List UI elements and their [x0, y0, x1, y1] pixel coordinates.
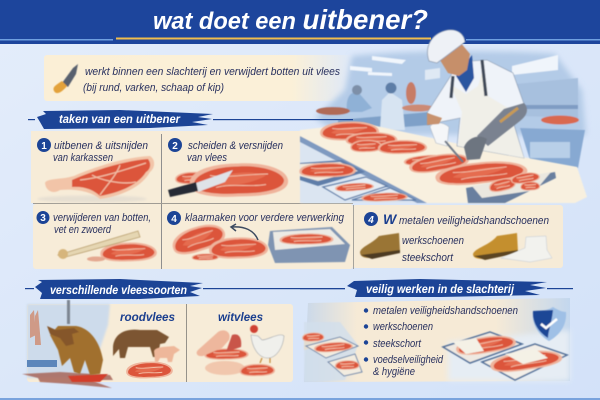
task 1 [37, 138, 154, 202]
bull [47, 300, 103, 375]
illustration: factory background [315, 51, 586, 168]
pig [154, 346, 180, 362]
bullet list: werkschoenen [373, 321, 433, 333]
icon: boot right [473, 233, 518, 260]
trays under table [299, 160, 556, 203]
meat on table [320, 122, 531, 187]
task 3 [36, 211, 157, 262]
intro text [83, 66, 340, 94]
neck [456, 55, 474, 92]
task 4: klaarmaken voor verdere verwerking [185, 212, 345, 224]
task 2: van vlees [187, 152, 227, 164]
hat [428, 30, 465, 63]
bone and meat [58, 231, 157, 262]
tray [268, 227, 350, 263]
icon: shield [533, 307, 566, 341]
heading: roodvlees: roodvlees [120, 312, 175, 324]
title: wat doet een uitbener? [153, 4, 428, 35]
panel: tasks background [31, 131, 563, 269]
task 3: verwijderen van botten, [53, 212, 151, 224]
panel: intro [44, 55, 354, 101]
task 1: 1 [41, 141, 47, 152]
panel: protective gear: metalen veiligheidshandschoenen [399, 215, 549, 227]
banner: vleessoorten: verschillende vleessoorten [50, 285, 187, 297]
panel: protective gear: 4 [367, 215, 374, 226]
icon: boot left [360, 233, 400, 259]
apron [450, 66, 524, 158]
face [440, 42, 470, 76]
task 2 [168, 138, 288, 197]
blood [22, 372, 113, 388]
panel: protective gear: steekschort [402, 252, 454, 264]
left trays [302, 322, 362, 382]
white meat [205, 361, 275, 376]
meat and knife [168, 163, 288, 197]
bullet list [364, 305, 518, 378]
chicken legs [197, 330, 249, 360]
hen [250, 325, 284, 363]
intro text: (bij rund, varken, schaap of kip) [83, 82, 224, 94]
icon: knife [53, 64, 78, 93]
intro text: werkt binnen een slachterij en verwijdert botten uit vlees [85, 66, 340, 78]
task 2: scheiden & versnijden [188, 140, 283, 152]
panel: protective gear: W [383, 211, 398, 227]
banner: vleessoorten [25, 279, 345, 299]
bullet list: metalen veiligheidshandschoenen [373, 305, 518, 317]
task 2: 2 [172, 141, 178, 152]
task 3: vet en zwoerd [54, 224, 112, 236]
packaged meat trays [443, 332, 567, 380]
panel: protective gear [360, 211, 552, 264]
banner: taken [28, 110, 353, 129]
task 4: 4 [171, 214, 177, 225]
task 4 [167, 211, 350, 263]
banner: veilig werken: veilig werken in de slachterij [366, 284, 515, 296]
hanging cloths [30, 310, 41, 345]
worker arms and gloves [427, 103, 527, 162]
task 1: uitbenen & uitsnijden [54, 140, 148, 152]
arrow [231, 224, 258, 240]
table [300, 123, 587, 203]
coat [427, 60, 524, 158]
header band [0, 0, 600, 44]
banner: taken: taken van een uitbener [59, 114, 181, 126]
bullet list: voedselveiligheid [373, 354, 444, 366]
red meat [126, 362, 173, 378]
banner: veilig werken [300, 279, 573, 297]
panel: meat types [22, 300, 293, 388]
worker [427, 30, 524, 158]
task 1: van karkassen [53, 152, 113, 164]
background workers [316, 82, 434, 130]
bullet list: steekschort [373, 338, 422, 350]
meat pieces [169, 220, 268, 260]
meat: carcass [37, 156, 154, 202]
panel: protective gear: werkschoenen [402, 235, 464, 247]
panel: veilig werken [302, 298, 570, 382]
bullet list: & hygiëne [373, 366, 415, 378]
task 3: 3 [40, 213, 46, 224]
icon: apron [501, 236, 552, 262]
heading: witvlees: witvlees [218, 312, 263, 324]
cow [113, 330, 169, 358]
